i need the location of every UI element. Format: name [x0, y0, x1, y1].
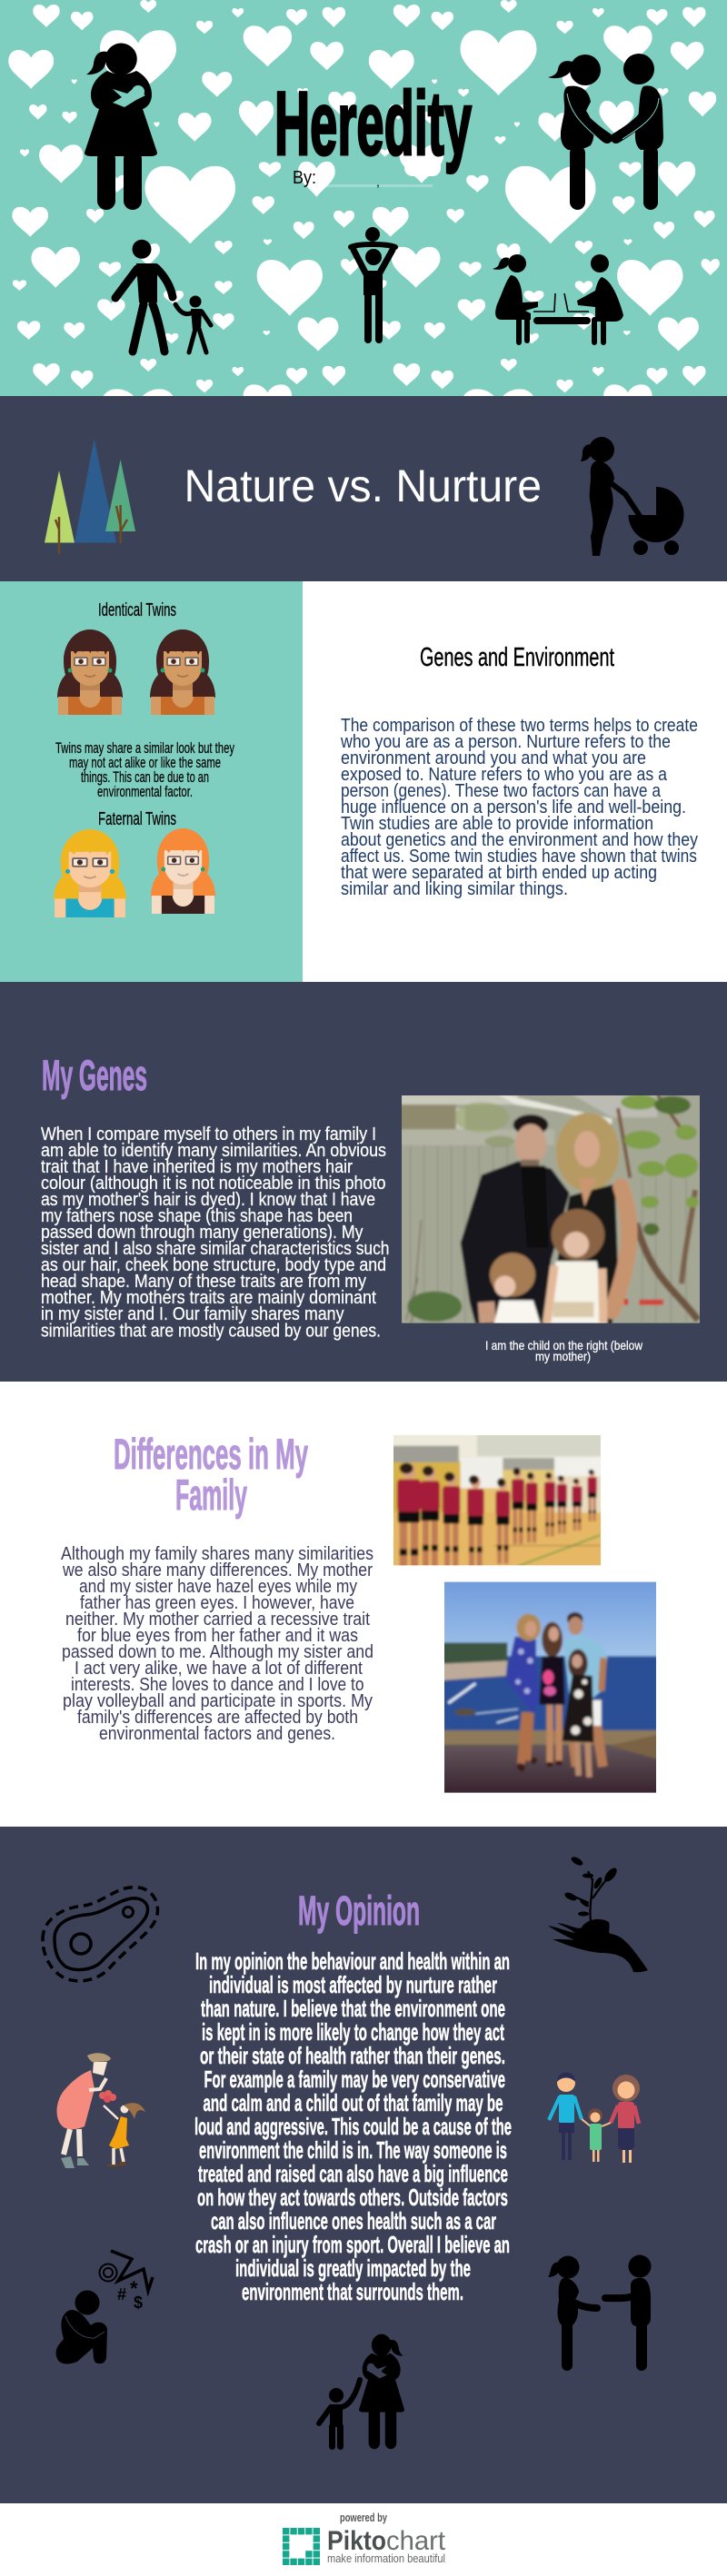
body text: When I compare myself to others in my family I — [41, 1125, 376, 1144]
icon: cell — [43, 1887, 157, 1981]
body text: environment that surrounds them. — [242, 2278, 463, 2305]
body text: in my sister and I. Our family shares many — [41, 1304, 344, 1324]
body text: who you are as a person. Nurture refers to the — [340, 732, 671, 752]
panel: hearts header — [0, 0, 727, 396]
body text: or their state of health rather than their genes. — [200, 2042, 505, 2069]
tagline: make information beautiful — [327, 2551, 445, 2565]
twins caption: things. This can be due to an — [81, 768, 209, 786]
body text: can also influence ones health such as a car — [211, 2207, 496, 2234]
body text: is kept in is more likely to change how they act — [202, 2018, 504, 2046]
photo: family by fence — [400, 1093, 702, 1326]
twins caption: Twins may share a similar look but they — [55, 739, 234, 757]
body text: treated and raised can also have a big influence — [198, 2160, 508, 2187]
icon: stressed person: * — [130, 2277, 138, 2300]
wordmark: chart — [386, 2526, 446, 2556]
wordmark: Pikto — [327, 2526, 386, 2556]
body text: interests. She loves to dance and I love to — [71, 1675, 364, 1695]
footer: piktochart branding — [0, 2503, 727, 2576]
avatar: blonde twin — [54, 829, 126, 917]
body text: trait that I have inherited is my mothers hair — [41, 1157, 353, 1177]
photo: volleyball team — [391, 1433, 603, 1573]
heading: Family — [175, 1471, 247, 1519]
body text: mother. My mothers traits are mainly dominant — [41, 1288, 376, 1308]
heart pattern — [8, 0, 720, 396]
icon: child on shoulders — [351, 227, 395, 343]
body text: passed down through many generations). My — [41, 1223, 364, 1243]
body text: that were separated at birth ended up acting — [341, 863, 657, 883]
panel: differences in my family — [61, 1435, 656, 1793]
body text — [61, 1544, 373, 1744]
icon: family of three — [549, 2073, 640, 2163]
body text: as our hair, cheek bone structure, body type and — [41, 1255, 386, 1275]
title: Heredity — [274, 73, 472, 173]
heading: fraternal twins: Faternal Twins — [98, 809, 176, 829]
icon: couple holding hands — [548, 54, 663, 210]
logo mark — [283, 2528, 320, 2565]
photo caption — [485, 1338, 643, 1363]
icon: mother holding baby — [85, 42, 157, 210]
twins caption — [55, 739, 234, 800]
body text: environmental factors and genes. — [99, 1724, 335, 1744]
avatar: identical twin two — [150, 629, 215, 715]
byline: , — [376, 174, 380, 189]
body text: I act very alike, we have a lot of different — [75, 1659, 363, 1679]
body text: environment the child is in. The way someone is — [199, 2136, 507, 2164]
body text: and calm and a child out of that family may be — [204, 2089, 503, 2116]
body text: colour (although it is not noticeable in this photo — [41, 1174, 385, 1194]
body text: individual is most affected by nurture rather — [209, 1971, 497, 1998]
icon: stressed person: # — [117, 2285, 126, 2304]
body text: individual is greatly impacted by the — [235, 2254, 471, 2282]
heading: My Genes — [42, 1051, 147, 1099]
hidden name smudge — [324, 158, 441, 187]
panel: genes and environment — [303, 581, 727, 982]
avatar: identical twin one — [57, 629, 123, 715]
body text: For example a family may be very conservative — [204, 2066, 505, 2093]
icon: mother and daughter with flowers — [56, 2053, 145, 2168]
heading: Genes and Environment — [420, 643, 614, 672]
byline — [293, 168, 380, 189]
icon: woman with stroller — [581, 437, 683, 556]
body text: am able to identify many similarities. An obvious — [41, 1141, 386, 1161]
heading: My Opinion — [298, 1887, 420, 1934]
body text: we also share many differences. My mother — [62, 1560, 373, 1580]
photo caption: my mother) — [535, 1349, 591, 1363]
body text: person (genes). These two factors can have a — [341, 781, 662, 801]
icon: seedling in hand — [548, 1855, 648, 1972]
avatar: red haired twin — [151, 828, 215, 914]
wordmark — [327, 2526, 446, 2556]
icon: stressed person — [56, 2251, 153, 2363]
panel: nature vs nurture — [0, 396, 727, 581]
byline: By: — [293, 168, 316, 188]
body text: neither. My mother carried a recessive trait — [65, 1610, 370, 1630]
body text: family's differences are affected by both — [77, 1708, 358, 1728]
body text — [41, 1125, 389, 1341]
photo: family at the beach — [443, 1579, 661, 1795]
body text — [340, 716, 698, 899]
icon: man and woman reaching — [548, 2254, 651, 2371]
powered by: powered by — [340, 2511, 388, 2524]
body text: environment around you and what you are — [341, 748, 646, 768]
heading: identical twins: Identical Twins — [98, 600, 176, 620]
section heading: Nature vs. Nurture — [184, 461, 542, 511]
body text: huge influence on a person's life and well-being. — [341, 798, 686, 817]
body text: similarities that are mostly caused by our genes. — [41, 1321, 381, 1341]
body text: head shape. Many of these traits are from my — [41, 1272, 366, 1292]
panel: my opinion — [0, 1827, 727, 2503]
body text: on how they act towards others. Outside factors — [197, 2184, 508, 2211]
icon: two people with laptops at table — [493, 254, 623, 342]
body text: play volleyball and participate in sports. My — [63, 1691, 373, 1711]
body text: sister and I also share similar characteristics such — [41, 1239, 389, 1259]
body text: Twin studies are able to provide information — [341, 814, 653, 834]
body text: as my mother's hair is dyed). I know that I have — [41, 1190, 375, 1210]
body text: father has green eyes. I however, have — [80, 1593, 354, 1613]
body text: passed down to me. Although my sister and — [62, 1642, 373, 1662]
body text: for blue eyes from her father and it was — [77, 1626, 358, 1646]
icon: trees — [45, 439, 135, 554]
body text: Although my family shares many similarities — [61, 1544, 373, 1564]
body text — [194, 1947, 512, 2305]
twins caption: environmental factor. — [97, 783, 193, 800]
icon: father and child — [115, 240, 211, 352]
icon: mother with baby and child — [319, 2334, 404, 2450]
twins caption: may not act alike or like the same — [69, 754, 221, 771]
body text: than nature. I believe that the environment one — [201, 1995, 505, 2022]
photo caption: I am the child on the right (below — [485, 1338, 643, 1352]
body text: exposed to. Nature refers to who you are as a — [341, 765, 668, 785]
body text: my fathers nose shape (this shape has been — [41, 1206, 353, 1226]
panel: twins — [0, 581, 303, 982]
heading — [114, 1430, 308, 1519]
icon: stressed person: $ — [134, 2294, 143, 2312]
panel: my genes — [0, 982, 727, 1382]
body text: similar and liking similar things. — [341, 879, 568, 899]
body text: and my sister have hazel eyes while my — [79, 1577, 357, 1597]
heading: Differences in My — [114, 1430, 308, 1478]
